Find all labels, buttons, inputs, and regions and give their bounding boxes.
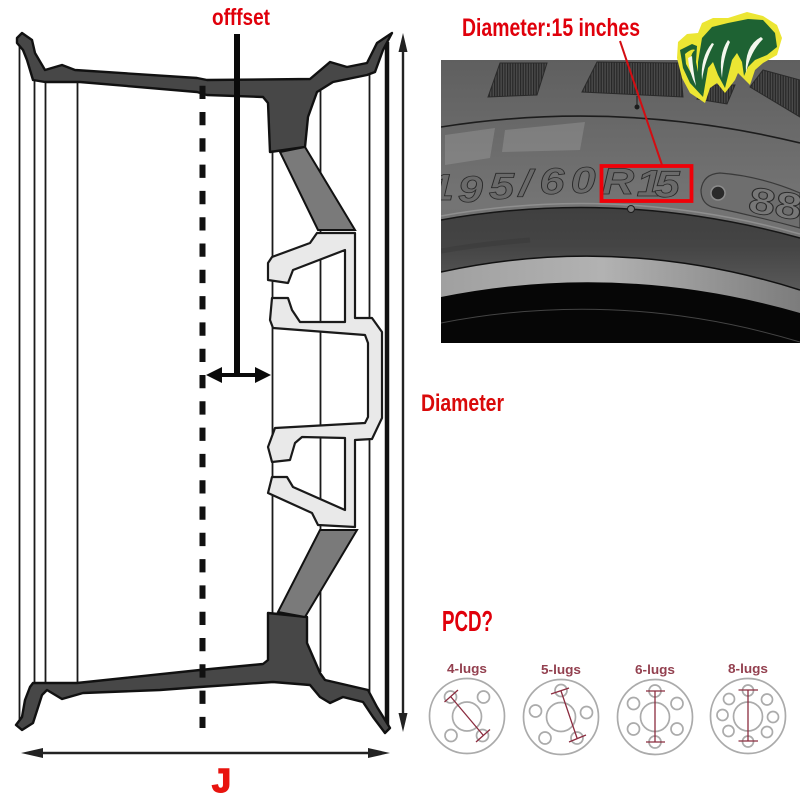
label: Diameter 15 inches: Diameter:15 inches — [462, 14, 640, 42]
8-lugs label: 8-lugs — [728, 661, 768, 676]
dark streak in band — [441, 240, 530, 251]
PCD diagram: 5 lugs — [524, 662, 598, 754]
upper sidewall ridge — [441, 116, 800, 143]
tire size embossed text: 195/60R15 — [429, 160, 681, 210]
tread blocks — [488, 62, 800, 117]
logo yellow stripe — [685, 50, 695, 75]
label: offset: offfset — [212, 4, 270, 30]
width J arrow — [21, 748, 390, 758]
thin line in the opening — [441, 309, 800, 342]
centre dashed line — [200, 86, 206, 728]
top spoke — [280, 147, 355, 230]
PCD diagram: 4 lugs — [430, 661, 504, 754]
6-lugs label: 6-lugs — [635, 662, 675, 677]
lower sidewall band — [441, 208, 800, 292]
lower ridge lines — [441, 208, 800, 238]
logo white streaks — [688, 37, 763, 86]
label: PCD: PCD? — [442, 606, 493, 638]
diameter arrow — [398, 33, 408, 732]
bottom rim profile — [16, 613, 390, 733]
tire sidewall photo — [429, 60, 800, 343]
outer rim line — [385, 42, 389, 725]
vertical rim lines — [20, 45, 370, 722]
logo — [677, 12, 782, 103]
bead ridge — [441, 256, 800, 314]
label: Diameter: Diameter — [421, 390, 504, 417]
black rim opening — [441, 282, 800, 343]
label: J: J — [212, 762, 231, 799]
offset double arrow — [206, 367, 271, 383]
bottom spoke — [278, 530, 357, 617]
5-lugs label: 5-lugs — [541, 662, 581, 677]
PCD diagram: 6 lugs — [618, 662, 692, 754]
wheel hub bracket — [268, 233, 382, 527]
offset vertical line — [234, 34, 240, 376]
logo yellow backing — [677, 12, 782, 103]
PCD diagram: 8 lugs — [710, 661, 786, 754]
tire pimple marks — [628, 96, 640, 212]
pointer line — [620, 41, 662, 165]
R15 highlight box — [602, 166, 692, 201]
4-lugs label: 4-lugs — [447, 661, 487, 676]
wheel cross-section diagram — [16, 33, 408, 758]
top rim profile — [17, 33, 392, 152]
lighter sidewall patches — [445, 122, 585, 165]
embossed bolt marker — [701, 173, 800, 228]
logo small left frond — [680, 44, 703, 97]
logo green fronds — [698, 19, 777, 97]
